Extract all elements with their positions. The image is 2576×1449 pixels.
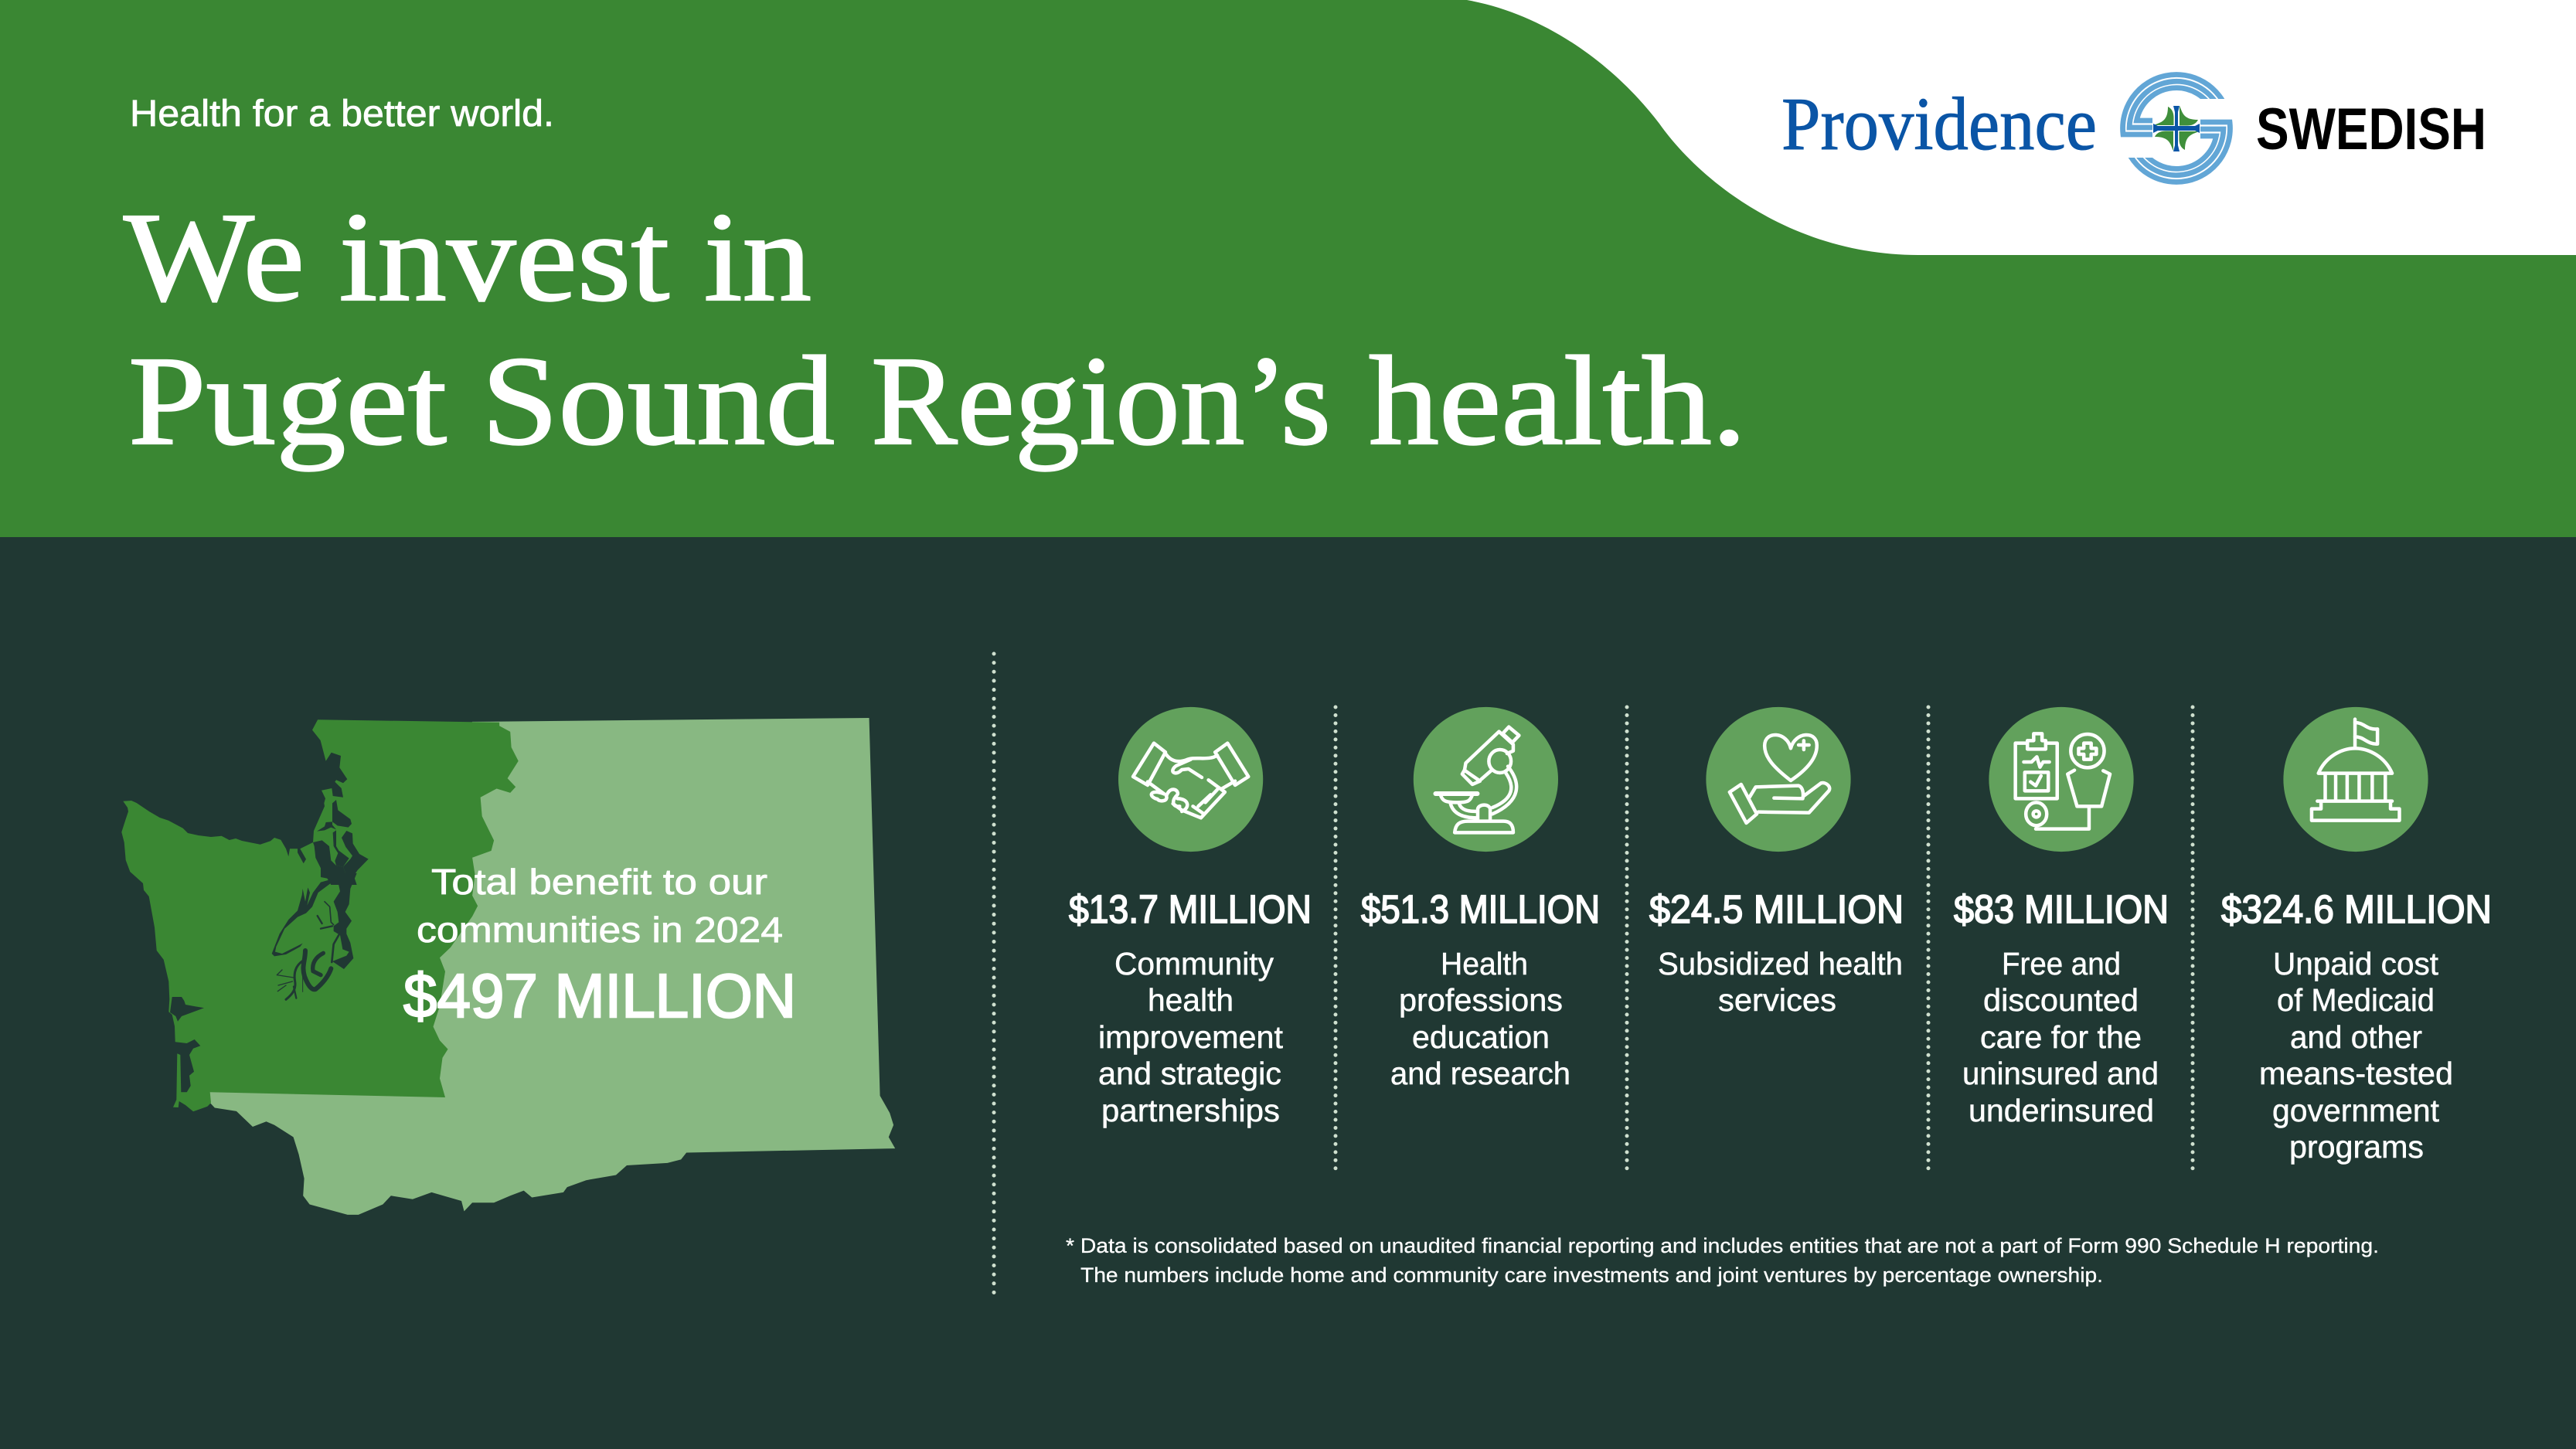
- footnote: [1066, 1234, 2379, 1287]
- description: Subsidized health: [1658, 946, 1903, 981]
- northern Puget Sound water: [313, 800, 369, 885]
- panel: column 5 unpaid Medicaid cost: [2221, 707, 2492, 1165]
- description: improvement: [1098, 1019, 1284, 1055]
- white logo area with curve: [1467, 0, 2576, 255]
- title: health.: [1369, 330, 1747, 471]
- amount: $24.5 MILLION: [1649, 887, 1904, 931]
- description: [1962, 946, 2159, 1128]
- logo: Providence Swedish: [1781, 74, 2486, 182]
- southern Puget Sound water: [272, 873, 357, 999]
- title: Region’s: [871, 330, 1331, 471]
- amount: $51.3 MILLION: [1361, 887, 1600, 931]
- dividers between columns: [1336, 707, 2193, 1170]
- callout: total benefit: [403, 862, 796, 1030]
- title: Puget: [128, 330, 447, 471]
- logo emblem: [2115, 74, 2237, 182]
- description: uninsured and: [1962, 1056, 2159, 1091]
- icon: handshake: [1118, 707, 1263, 852]
- description: discounted: [1983, 982, 2139, 1018]
- amount: $83 MILLION: [1954, 887, 2169, 931]
- icon: heart in hand: [1706, 707, 1851, 852]
- description: Community: [1114, 946, 1274, 981]
- callout: total benefit: communities in 2024: [417, 910, 783, 950]
- description: health: [1148, 982, 1234, 1018]
- title: Sound: [482, 330, 835, 471]
- divider: main dotted line: [992, 654, 995, 1300]
- description: [1390, 946, 1570, 1091]
- description: of Medicaid: [2277, 982, 2435, 1018]
- description: means-tested: [2259, 1056, 2453, 1091]
- logo wordmark: Swedish: SWEDISH: [2256, 97, 2486, 162]
- panel: column 4 free and discounted care: [1954, 707, 2169, 1128]
- logo wordmark: Providence: Providence: [1781, 83, 2097, 166]
- icon: government building: [2283, 707, 2428, 852]
- icon: microscope: [1414, 707, 1558, 852]
- callout: total benefit: $497 MILLION: [403, 961, 796, 1030]
- western Washington region: [121, 719, 519, 1111]
- description: Free and: [2002, 946, 2121, 981]
- description: and research: [1390, 1056, 1570, 1091]
- description: underinsured: [1969, 1093, 2154, 1128]
- description: and other: [2290, 1019, 2422, 1055]
- amount: $324.6 MILLION: [2221, 887, 2492, 931]
- panel: column 1 community health: [1069, 707, 1312, 1128]
- amount: $13.7 MILLION: [1069, 887, 1312, 931]
- footnote: * Data is consolidated based on unaudited financial reporting and includes entities that are not a part of Form 990 Schedule H reporting.: [1066, 1234, 2379, 1257]
- panel: green header: [0, 0, 2576, 537]
- description: education: [1412, 1019, 1550, 1055]
- description: services: [1718, 982, 1836, 1018]
- description: and strategic: [1098, 1056, 1281, 1091]
- footnote: The numbers include home and community care investments and joint ventures by percentage ownership.: [1080, 1264, 2103, 1287]
- description: Unpaid cost: [2273, 946, 2439, 981]
- map of Washington state: [121, 718, 895, 1215]
- description: [2259, 946, 2453, 1165]
- icon: clipboard and stethoscope: [1989, 707, 2134, 852]
- description: [1098, 946, 1284, 1128]
- description: Health: [1441, 946, 1528, 981]
- description: partnerships: [1101, 1093, 1280, 1128]
- description: care for the: [1980, 1019, 2142, 1055]
- description: programs: [2289, 1129, 2424, 1165]
- Grays Harbor water: [170, 997, 204, 1022]
- description: [1658, 946, 1903, 1018]
- callout: total benefit: Total benefit to our: [431, 862, 767, 902]
- panel: column 2 health professions: [1361, 707, 1600, 1091]
- description: professions: [1399, 982, 1563, 1018]
- panel: column 3 subsidized services: [1649, 707, 1904, 1018]
- eastern Washington region: [210, 718, 895, 1215]
- title: We invest in: [124, 186, 812, 328]
- tagline: Health for a better world.: [130, 94, 554, 134]
- description: government: [2272, 1093, 2440, 1128]
- title: [124, 186, 1747, 471]
